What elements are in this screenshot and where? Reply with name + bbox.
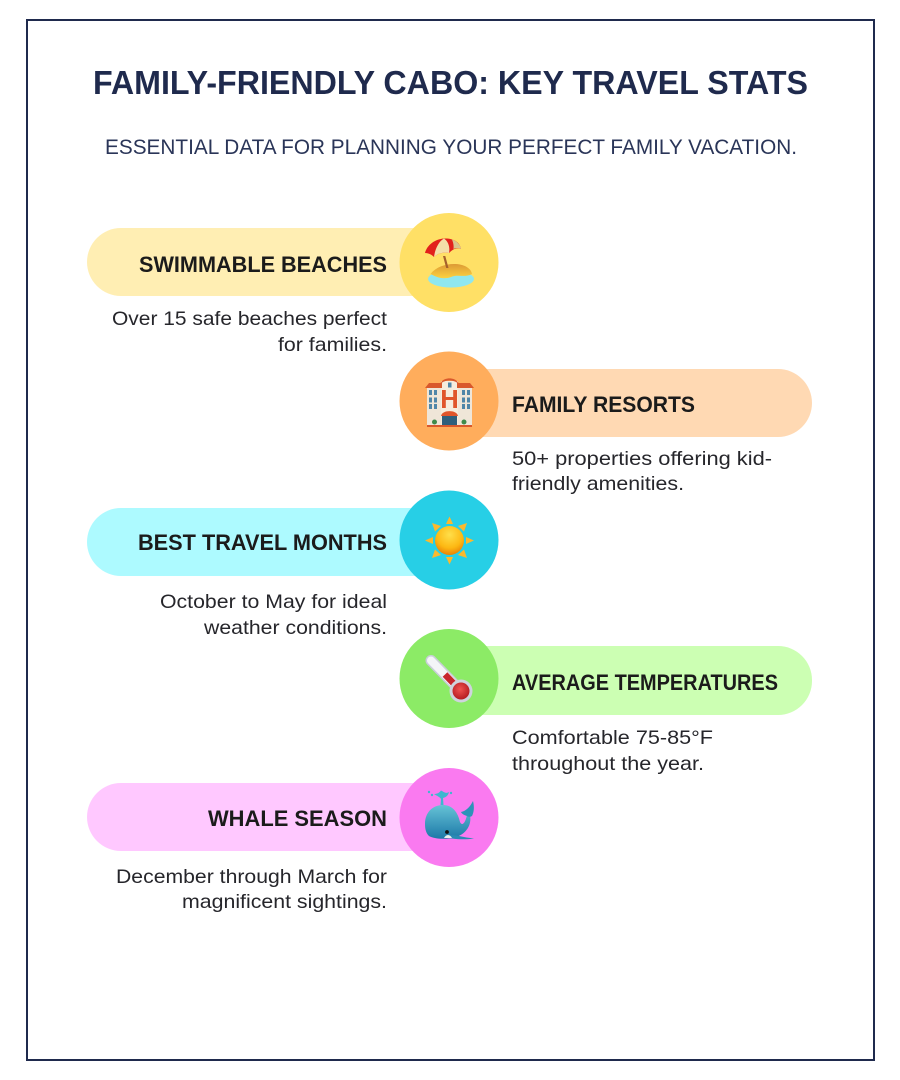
icon: hotel bbox=[425, 378, 474, 427]
panel: average temperatures bbox=[400, 629, 812, 775]
title: FAMILY-FRIENDLY CABO: KEY TRAVEL STATS bbox=[93, 64, 808, 101]
text: family resorts: 50+ properties offering kid- bbox=[512, 448, 772, 470]
heading: swimmable beaches: SWIMMABLE BEACHES bbox=[139, 252, 387, 277]
text: average temperatures: Comfortable 75-85°F bbox=[512, 727, 713, 749]
heading: whale season: WHALE SEASON bbox=[208, 806, 387, 831]
label pill: whale season bbox=[87, 783, 467, 851]
circle: swimmable beaches bbox=[400, 213, 498, 312]
circle: average temperatures bbox=[400, 629, 498, 728]
text: family resorts: friendly amenities. bbox=[512, 473, 684, 495]
text: whale season: magnificent sightings. bbox=[182, 891, 387, 913]
heading: best travel months: BEST TRAVEL MONTHS bbox=[138, 530, 387, 555]
panel: best travel months bbox=[87, 490, 498, 639]
heading: average temperatures: AVERAGE TEMPERATURES bbox=[512, 670, 778, 695]
circle: family resorts bbox=[400, 352, 498, 450]
icon: whale bbox=[425, 790, 474, 839]
label pill: family resorts bbox=[432, 369, 812, 437]
icon: sun bbox=[425, 516, 474, 564]
text: best travel months: weather conditions. bbox=[203, 617, 387, 639]
panel: family resorts bbox=[400, 352, 812, 495]
subtitle: ESSENTIAL DATA FOR PLANNING YOUR PERFECT FAMILY VACATION. bbox=[105, 136, 797, 159]
label pill: best travel months bbox=[87, 508, 467, 576]
circle: best travel months bbox=[400, 490, 498, 590]
heading: family resorts: FAMILY RESORTS bbox=[512, 392, 695, 417]
icon: beach umbrella on island bbox=[425, 238, 474, 288]
icon: thermometer bbox=[431, 660, 472, 702]
text: best travel months: October to May for ideal bbox=[160, 591, 387, 613]
label pill: swimmable beaches bbox=[87, 228, 467, 296]
panel: whale season bbox=[87, 768, 498, 913]
text: whale season: December through March for bbox=[116, 866, 388, 888]
text: average temperatures: throughout the year. bbox=[512, 753, 704, 775]
label pill: average temperatures bbox=[432, 646, 812, 715]
text: swimmable beaches: Over 15 safe beaches perfect bbox=[112, 308, 388, 330]
text: swimmable beaches: for families. bbox=[278, 334, 387, 356]
panel: swimmable beaches bbox=[87, 213, 498, 356]
circle: whale season bbox=[400, 768, 498, 867]
